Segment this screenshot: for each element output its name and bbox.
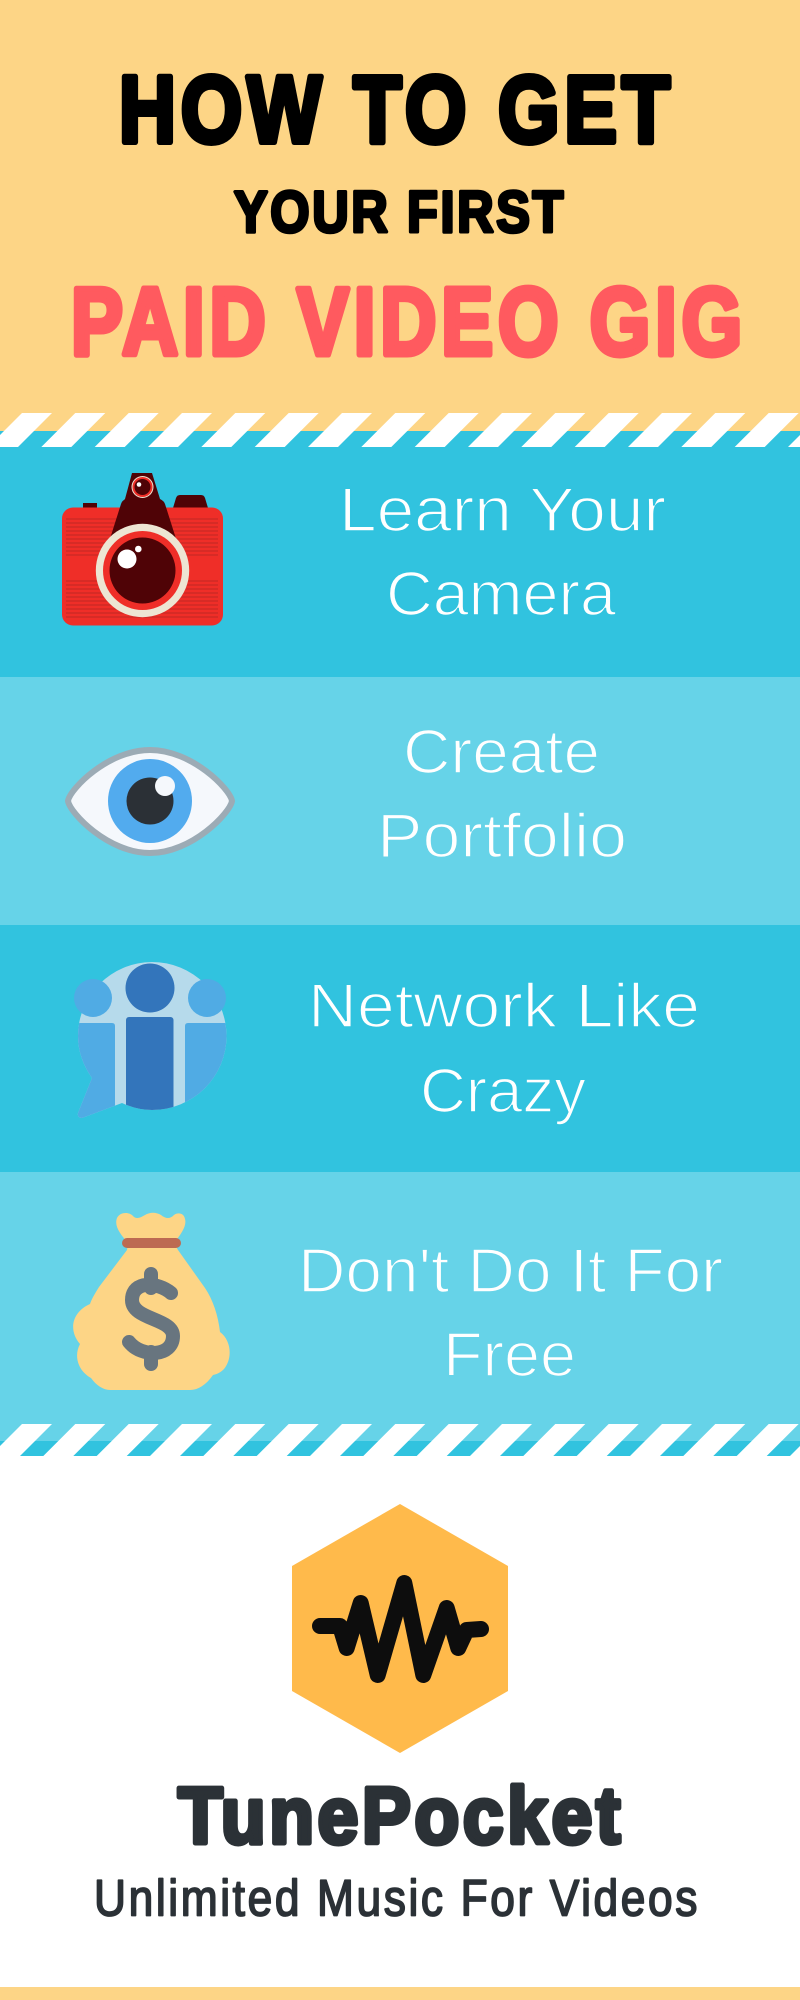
heading: learn your camera: Learn Your: [339, 476, 666, 545]
stripes: top hazard band: [0, 413, 800, 447]
bottom yellow bar: [0, 1987, 800, 2000]
heading: don't do it for free: Don't Do It For: [298, 1237, 723, 1306]
title: how to get: HOW TO GET: [119, 57, 675, 163]
panel: learn your camera: [0, 431, 800, 677]
heading: learn your camera: Camera: [386, 560, 617, 629]
icon: hexagon logo: [292, 1504, 508, 1753]
heading: learn your camera: [339, 476, 666, 629]
icon: networking people: [74, 962, 226, 1118]
panel: title header: [0, 0, 800, 431]
heading: don't do it for free: [298, 1237, 723, 1390]
heading: create portfolio: [377, 718, 627, 871]
heading: network like crazy: Network Like: [308, 972, 700, 1041]
decorative stripe bands background: [0, 1441, 800, 1456]
brand name: TunePocket: [178, 1771, 624, 1860]
panel: don't do it for free: [0, 1172, 800, 1441]
panel: create portfolio: [0, 677, 800, 925]
icon: camera: [62, 473, 223, 626]
heading: network like crazy: [308, 972, 700, 1126]
heading: create portfolio: Portfolio: [377, 802, 627, 871]
icon: money bag: [73, 1213, 230, 1390]
panel: tunepocket footer: [0, 1456, 800, 2000]
tagline: Unlimited Music For Videos: [94, 1870, 700, 1926]
heading: don't do it for free: Free: [443, 1321, 576, 1390]
subtitle: your first: YOUR FIRST: [234, 180, 566, 245]
panel: network like crazy: [0, 925, 800, 1172]
icon: eye: [68, 750, 232, 853]
heading: network like crazy: Crazy: [420, 1057, 586, 1126]
stripes: bottom hazard band: [0, 1424, 800, 1456]
heading: create portfolio: Create: [403, 718, 600, 787]
